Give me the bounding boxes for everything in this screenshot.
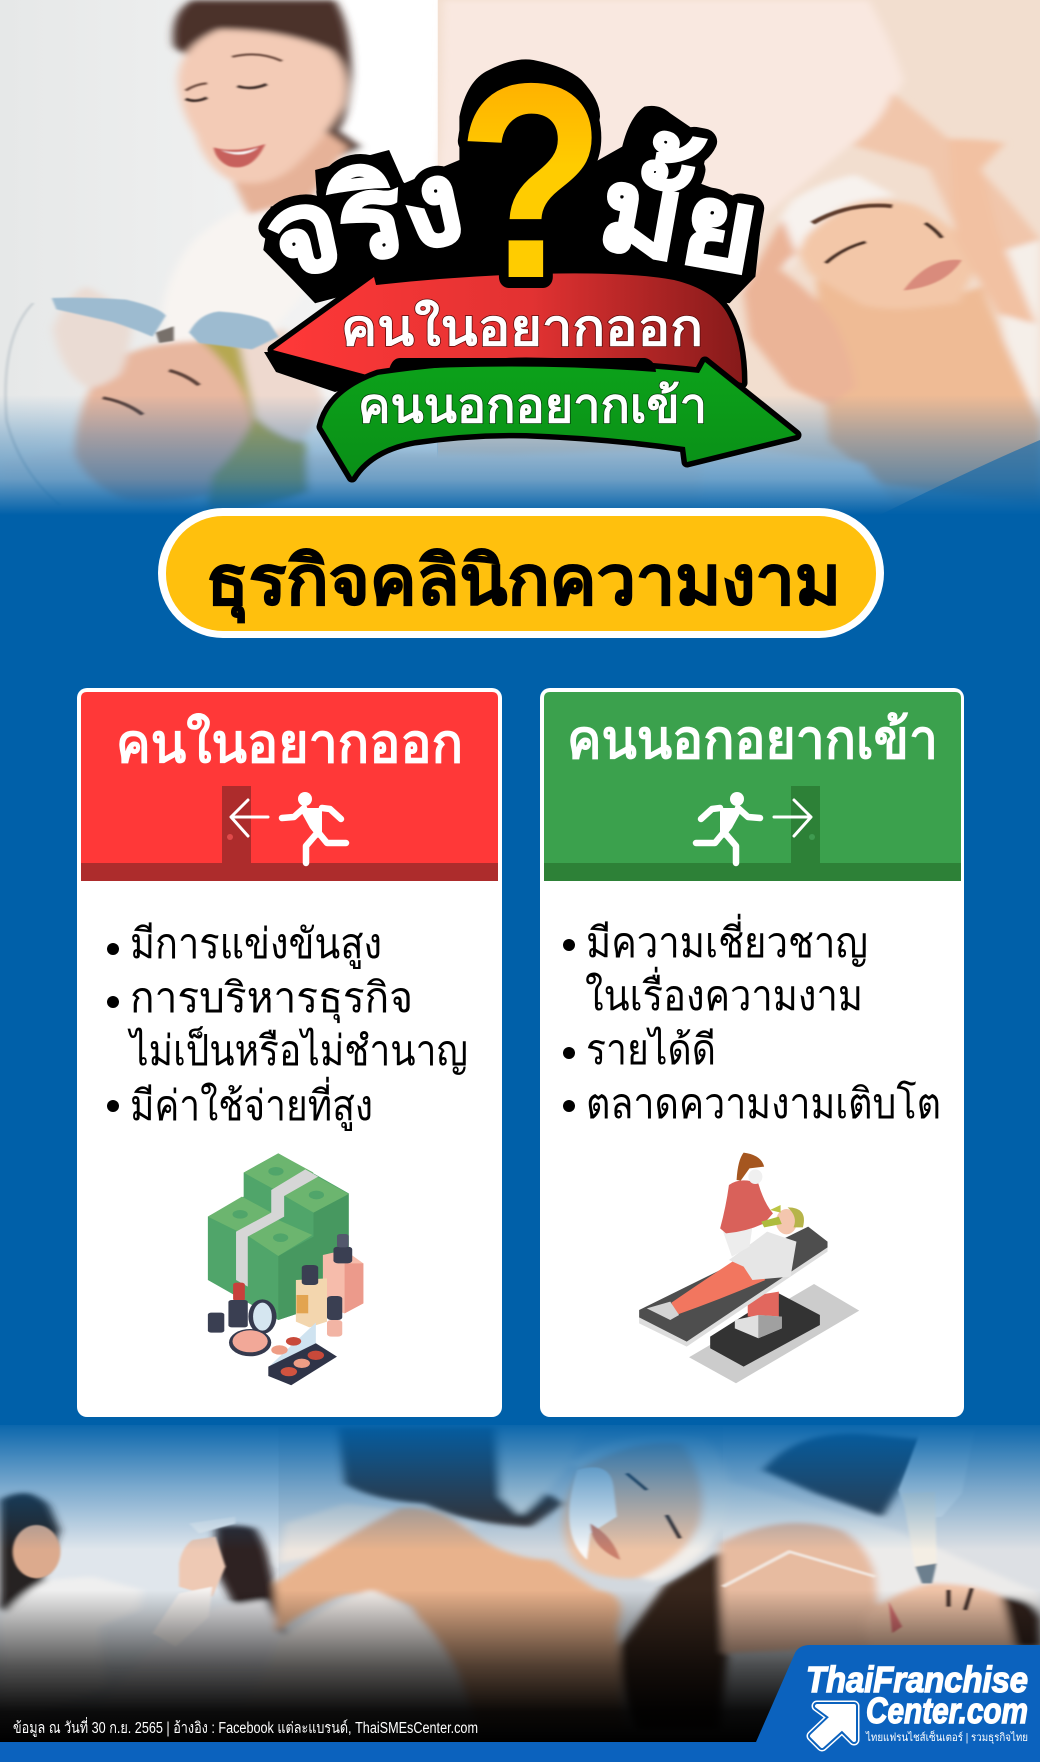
red arrow extrusion bbox=[264, 352, 370, 392]
red arrow label: คนในอยากออก bbox=[341, 299, 703, 356]
illustration: treatment bed bbox=[639, 1153, 859, 1383]
photo: center face band bbox=[577, 1452, 723, 1586]
question mark: ? bbox=[456, 26, 606, 336]
photo: right device and features bbox=[899, 1427, 975, 1520]
headline pill bbox=[158, 508, 884, 638]
green header bbox=[544, 692, 961, 881]
red arrow bbox=[273, 273, 742, 383]
photo: center towel and skin bbox=[279, 1503, 478, 1563]
photo: client left skin bbox=[74, 341, 255, 502]
title: real or not lockup bbox=[255, 26, 796, 477]
headline pill: ธุรกิจคลินิกความงาม bbox=[206, 543, 841, 623]
word right outline: มั้ย bbox=[590, 123, 771, 298]
illustration: money and cosmetics bbox=[208, 1153, 363, 1385]
icon: exit runner left bbox=[222, 786, 346, 863]
photo: client left hair net bbox=[199, 338, 308, 516]
heading: คนนอกอยากเข้า bbox=[567, 710, 938, 770]
photo: left consultant bbox=[0, 1490, 66, 1614]
bullet list bbox=[107, 920, 468, 1131]
photo: left faces and gloves bbox=[13, 1525, 60, 1578]
word right fill: มั้ย bbox=[590, 123, 771, 298]
panel: insiders want out bbox=[77, 688, 502, 1417]
word left fill: จริง bbox=[255, 136, 474, 303]
green arrow label: คนนอกอยากเข้า bbox=[358, 380, 707, 433]
photo: devices bbox=[52, 298, 166, 337]
photo: client right features bbox=[813, 206, 892, 223]
bullet list: การบริหารธุรกิจ bbox=[130, 974, 413, 1024]
red header bbox=[81, 692, 498, 881]
photo: client right face bbox=[796, 201, 975, 309]
bullet list: มีความเชี่ยวชาญ bbox=[586, 914, 868, 967]
bottom photo fades bbox=[0, 1425, 1040, 1550]
heading: คนในอยากออก bbox=[116, 712, 463, 774]
bottom photo collage bbox=[0, 1425, 1040, 1742]
hero photo collage bbox=[0, 0, 1040, 512]
source line: ข้อมูล ณ วันที่ 30 ก.ย. 2565 | อ้างอิง : Facebook แต่ละแบรนด์, ThaiSMEsCenter.com bbox=[13, 1717, 478, 1738]
bullet list: ในเรื่องความงาม bbox=[585, 967, 863, 1019]
bullet list: ตลาดความงามเติบโต bbox=[586, 1079, 941, 1127]
bullet list: รายได้ดี bbox=[586, 1026, 716, 1073]
green arrow bbox=[322, 362, 796, 477]
icon: logo arrow bbox=[812, 1706, 854, 1746]
panel: outsiders want in bbox=[540, 688, 964, 1417]
photo: center mask and features bbox=[569, 1467, 617, 1560]
photo: client left features bbox=[103, 370, 199, 415]
photo: therapist hair bbox=[173, 0, 361, 164]
bullet list: มีค่าใช้จ่ายที่สูง bbox=[130, 1077, 373, 1131]
word left outline: จริง bbox=[255, 136, 474, 303]
black backing bbox=[263, 59, 763, 303]
photo: therapist white coat bbox=[163, 145, 365, 404]
photo: client left body bbox=[133, 446, 862, 589]
photo: left client bbox=[216, 1525, 285, 1637]
photo: therapist face bbox=[178, 29, 346, 183]
photo: center hair bbox=[338, 1427, 564, 1527]
photo: client right neck bbox=[998, 240, 1040, 425]
bullet list: มีการแข่งขันสูง bbox=[130, 920, 382, 969]
bullet list bbox=[563, 914, 941, 1127]
photo: gloves bbox=[53, 286, 133, 387]
black gap bar bbox=[389, 358, 656, 372]
hero fade into blue bbox=[0, 395, 1040, 515]
logo: ThaiFranchise Center bbox=[0, 1645, 1040, 1762]
icon: exit runner right bbox=[696, 786, 820, 863]
photo: therapist features bbox=[186, 54, 282, 90]
bullet list: ไม่เป็นหรือไม่ชำนาญ bbox=[127, 1026, 468, 1075]
photo: therapist shirt bbox=[438, 0, 903, 295]
photo: right room and pillow bbox=[763, 1433, 929, 1517]
